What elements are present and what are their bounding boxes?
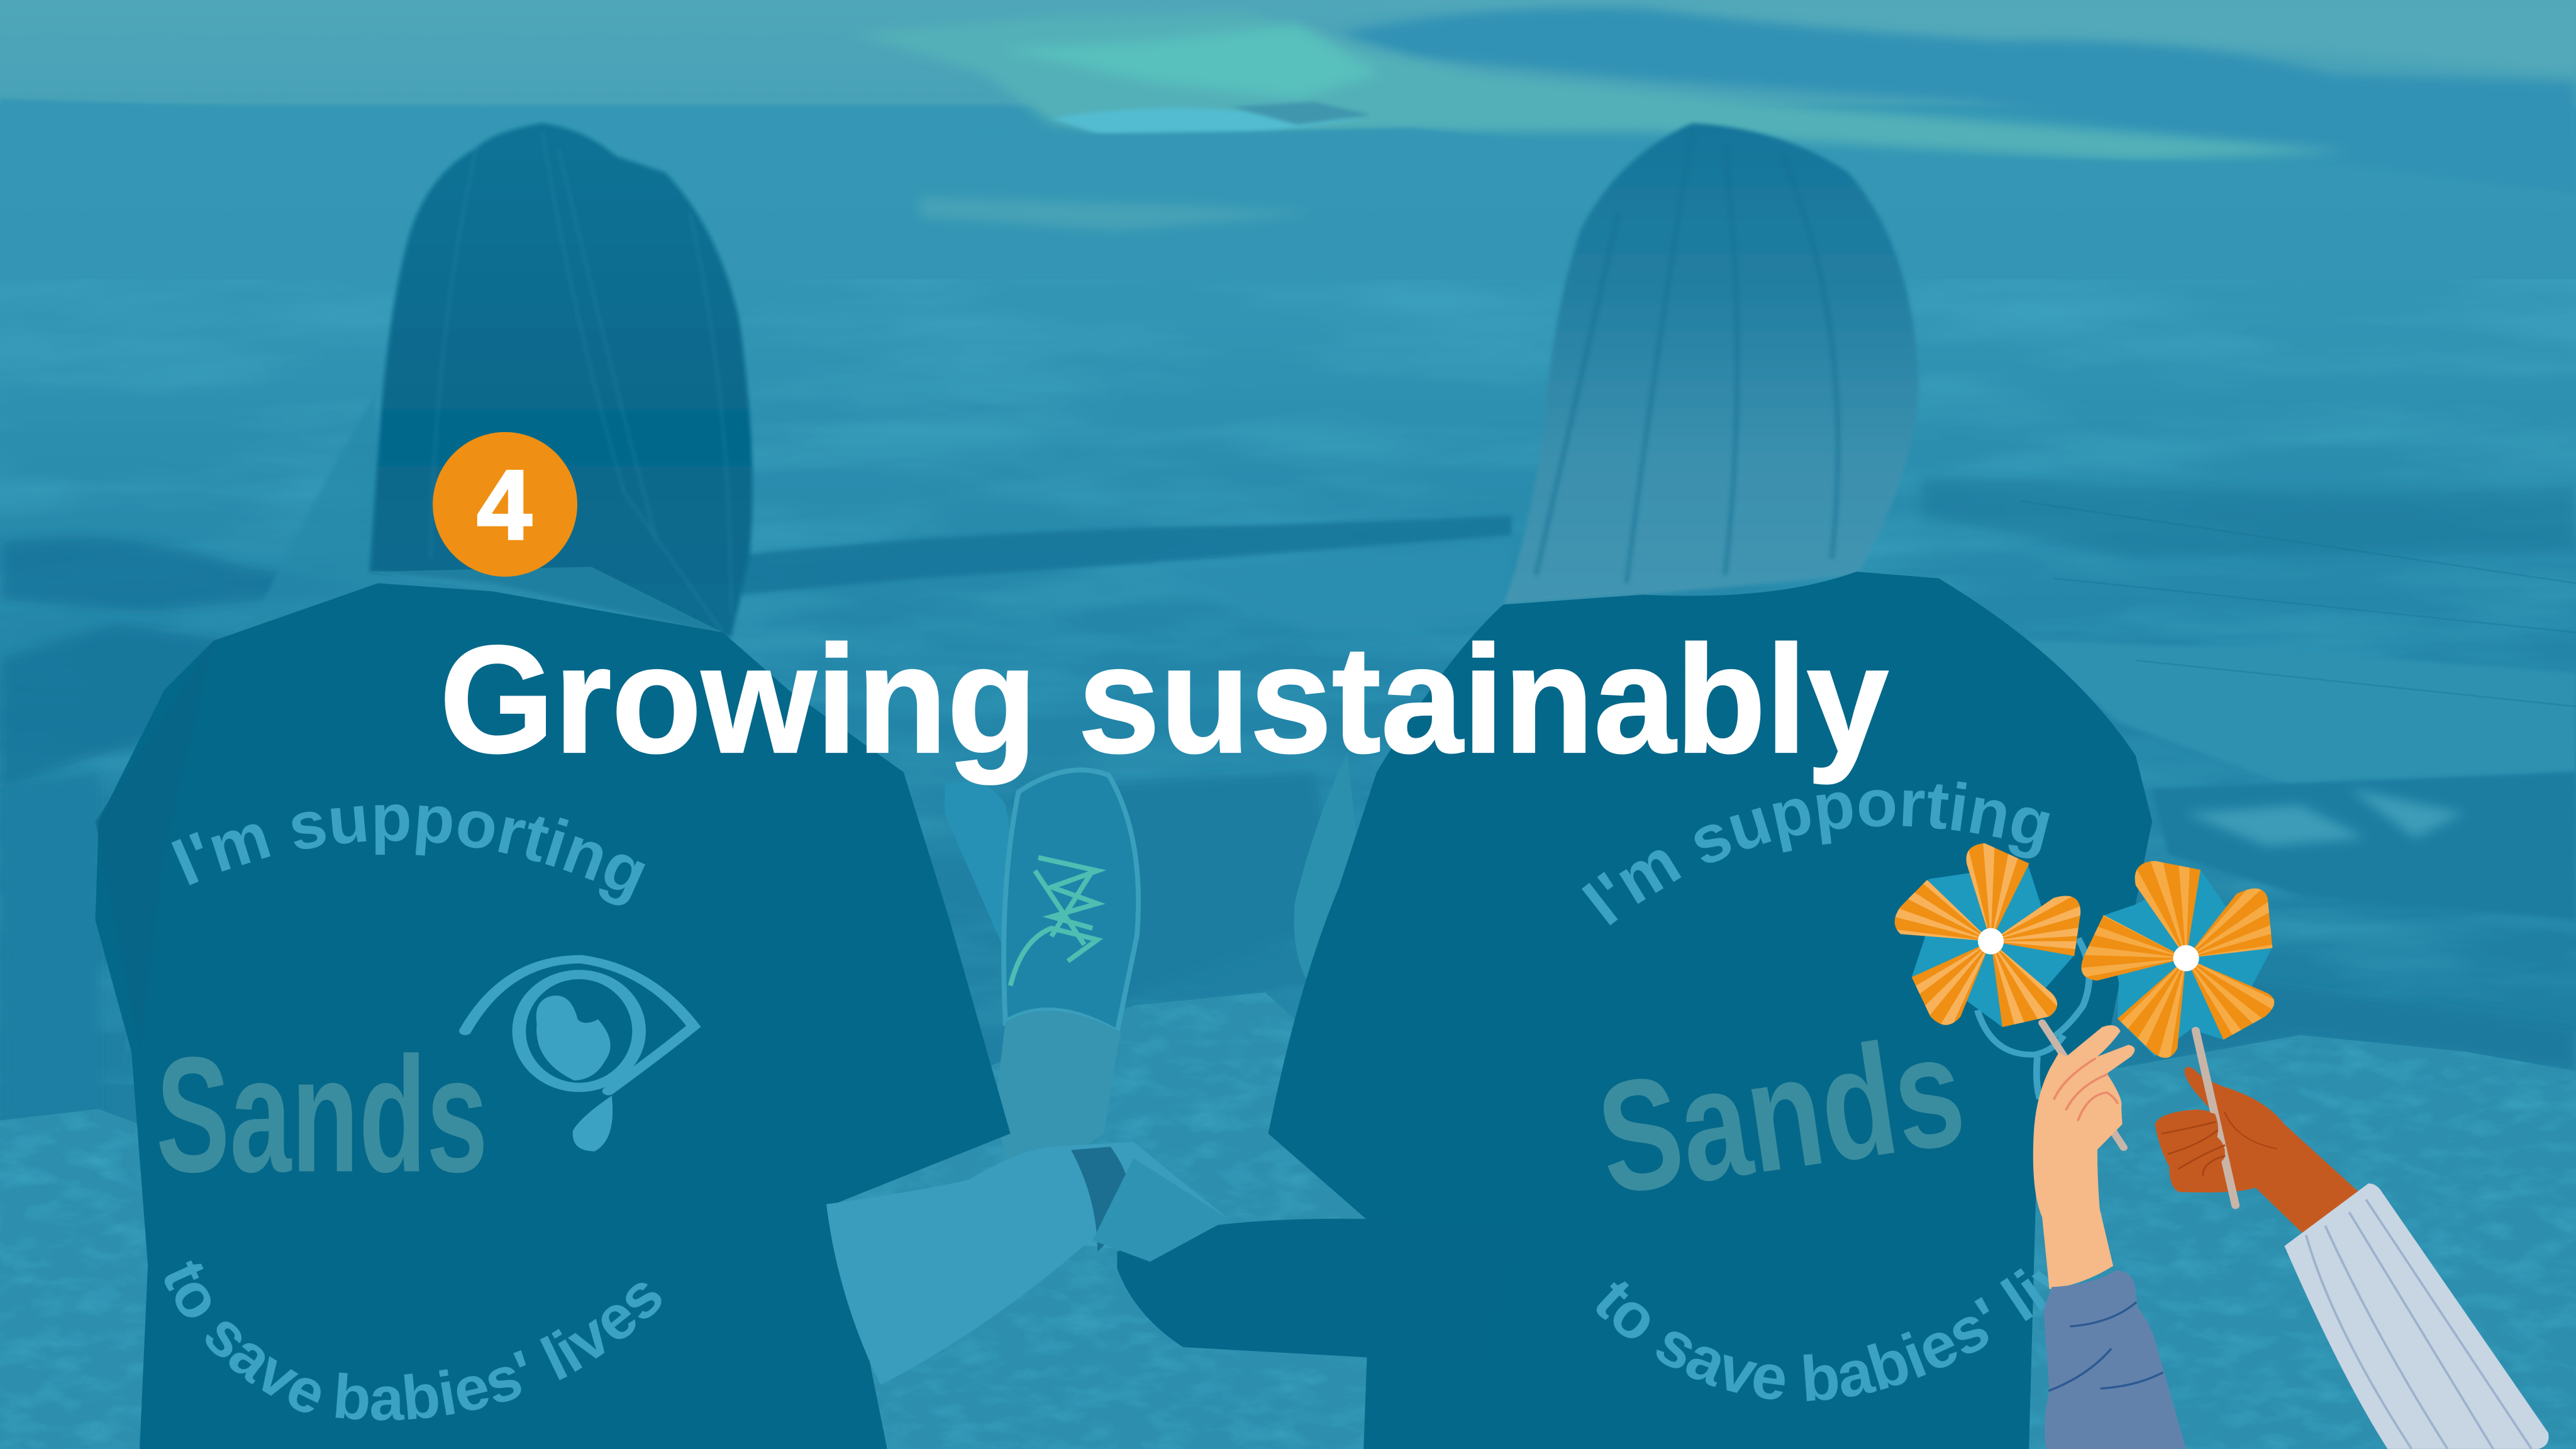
striped sleeve [2284,1184,2549,1449]
right shoe [1004,770,1138,1031]
far shoe [1294,752,1360,1002]
shirt [96,583,1011,1449]
left shoe [945,782,1011,945]
distant farmland fields [0,279,2576,1121]
pinwheel 2 [2081,860,2274,1058]
sleeve folds [2050,1302,2162,1391]
hand [1092,1158,1229,1262]
shirt text: to save babies' lives: to save babies' lives [165,1260,662,1421]
finger lines [2054,1058,2118,1120]
darker-skinned hand [2155,1067,2359,1234]
arm [826,1142,1229,1385]
leg [994,1011,1121,1191]
shoe laces [1011,858,1097,985]
title: Growing sustainably [440,614,1889,785]
blue sleeve [2043,1270,2186,1449]
illustration: hands holding pinwheels [1872,828,2549,1449]
stick 1 [2042,1023,2124,1148]
shirt text: Sands: Sands [156,1024,488,1207]
shirt text: Sands: Sands [1588,1001,1974,1228]
watch [1071,1146,1131,1252]
finger creases [2162,1122,2224,1175]
palm crease [2224,1111,2277,1149]
rocky ledge [0,985,2576,1449]
hair strands [430,131,731,633]
icon: Sands eye logo [465,959,694,1152]
shirt text: I'm supporting: I'm supporting [1582,781,2050,926]
hair strands [1536,131,1838,583]
light-skinned hand [2033,1025,2135,1289]
long-sleeve arm [1117,1219,1528,1363]
badge number: 4 [477,450,532,560]
eye logo fragment on shirt [1977,938,2089,1099]
stick 2 [2196,1030,2236,1206]
pinwheel 1 [1894,843,2080,1027]
sleeve shading [96,641,214,1052]
sky clouds [0,0,2576,230]
shirt text: I'm supporting: I'm supporting [171,804,645,906]
hair [1503,123,1919,604]
hair [370,123,752,638]
shoes and legs [945,752,1360,1191]
neck [370,567,723,633]
left woman: back view [96,123,1229,1449]
hair wisps [123,394,394,1068]
number badge [433,432,577,577]
sleeve stripes [2306,1199,2531,1449]
fist fingers [2155,1111,2225,1190]
shirt [1269,572,2152,1449]
